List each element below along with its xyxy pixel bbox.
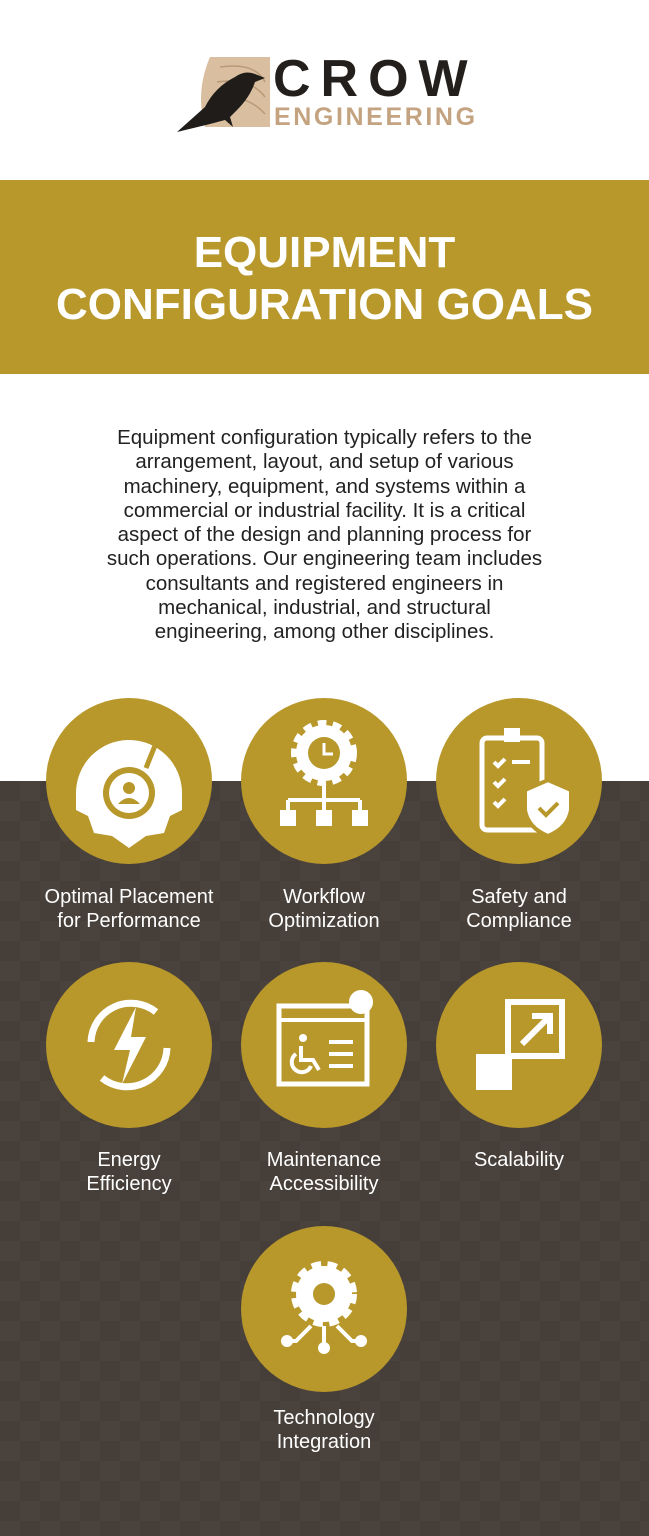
intro text: arrangement, layout, and setup of various [135,450,514,473]
label: Energy [97,1149,161,1171]
item: workflow [241,698,407,932]
intro text: aspect of the design and planning process for [118,523,531,546]
label: Efficiency [86,1173,172,1195]
logo [177,52,478,132]
icon: scale squares [436,962,602,1128]
intro text: commercial or industrial facility. It is a critical [124,499,525,522]
label: Scalability [474,1149,564,1171]
label: Safety and [471,886,567,908]
label: Integration [277,1431,371,1453]
intro text [107,426,542,643]
label [273,1407,375,1453]
intro text: machinery, equipment, and systems within a [124,475,525,498]
item: maintenance [241,962,407,1195]
label [268,886,380,932]
label [86,1149,172,1195]
intro text: Equipment configuration typically refers to the [117,426,532,449]
item: safety [436,698,602,932]
label: for Performance [57,910,201,932]
title band [0,180,649,374]
icon: gauge gear [46,698,212,864]
crow [177,73,265,132]
dark background [0,781,649,1536]
label [466,886,572,932]
label: Optimization [268,910,380,932]
title band: EQUIPMENT [194,228,455,277]
item: technology [241,1226,407,1453]
intro text: engineering, among other disciplines. [155,620,494,643]
label: Technology [273,1407,375,1429]
intro text: such operations. Our engineering team includes [107,547,542,570]
icon: gear network [241,1226,407,1392]
icon: lightning cycle [46,962,212,1128]
label: Maintenance [267,1149,381,1171]
item: optimal placement [45,698,214,932]
label: Accessibility [270,1173,378,1195]
title band: CONFIGURATION GOALS [56,280,593,329]
label: Compliance [466,910,572,932]
icon: clipboard shield [436,698,602,864]
logo: ENGINEERING [274,103,478,131]
item: energy [46,962,212,1195]
icon: gear clock flow [241,698,407,864]
intro text: mechanical, industrial, and structural [158,596,491,619]
icon: accessibility window [241,962,407,1128]
item: scalability [436,962,602,1171]
label [45,886,214,932]
wood rings [201,57,270,127]
label [267,1149,381,1195]
label: Optimal Placement [45,886,213,908]
intro text: consultants and registered engineers in [146,572,503,595]
label: Workflow [283,886,365,908]
